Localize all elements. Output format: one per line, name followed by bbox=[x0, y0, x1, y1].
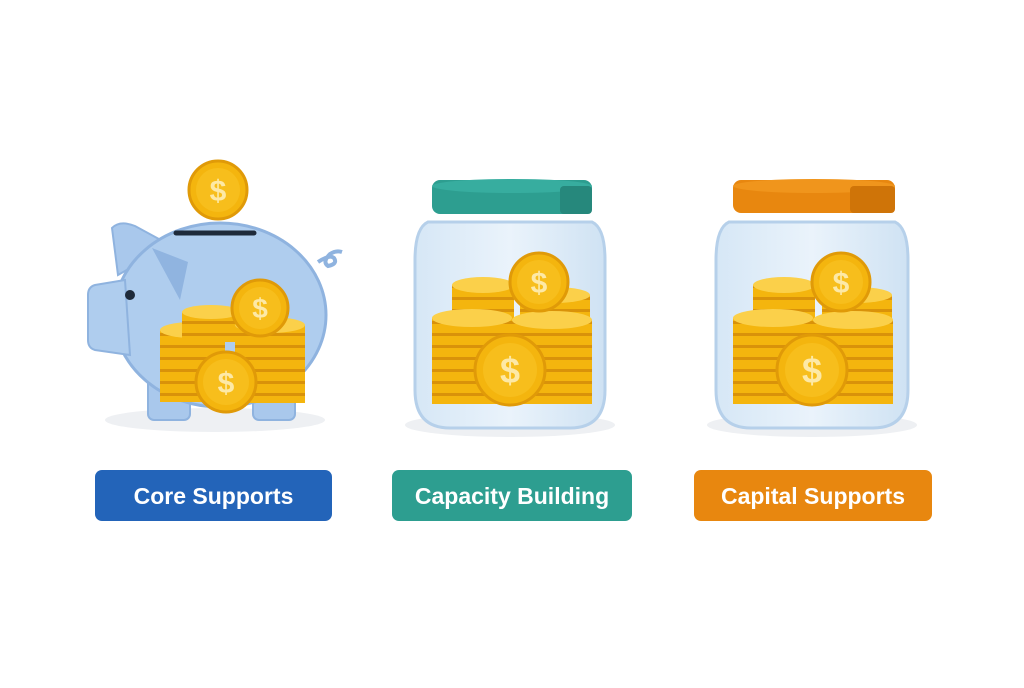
label: Capital Supports: Capital Supports bbox=[721, 483, 905, 509]
coins in pig bbox=[160, 280, 305, 412]
label: Capital Supports bbox=[694, 470, 932, 521]
icon: orange jar: $ bbox=[802, 350, 822, 391]
icon: falling coin bbox=[189, 161, 247, 219]
icon: teal jar: $ bbox=[531, 267, 548, 300]
icon: falling coin: $ bbox=[210, 175, 227, 208]
icon: orange jar: $ bbox=[833, 267, 850, 300]
label: Capacity Building bbox=[392, 470, 632, 521]
coins in pig: $ bbox=[252, 293, 268, 324]
label: Core Supports: Core Supports bbox=[134, 483, 293, 509]
icon: teal jar: $ bbox=[500, 350, 520, 391]
icon: orange jar bbox=[716, 179, 908, 428]
label: Capacity Building: Capacity Building bbox=[415, 483, 609, 509]
icon: piggy bank bbox=[88, 161, 342, 420]
shadows bbox=[105, 408, 917, 437]
icon: teal jar bbox=[415, 179, 605, 428]
coins in pig: $ bbox=[218, 367, 235, 400]
label: Core Supports bbox=[95, 470, 332, 521]
